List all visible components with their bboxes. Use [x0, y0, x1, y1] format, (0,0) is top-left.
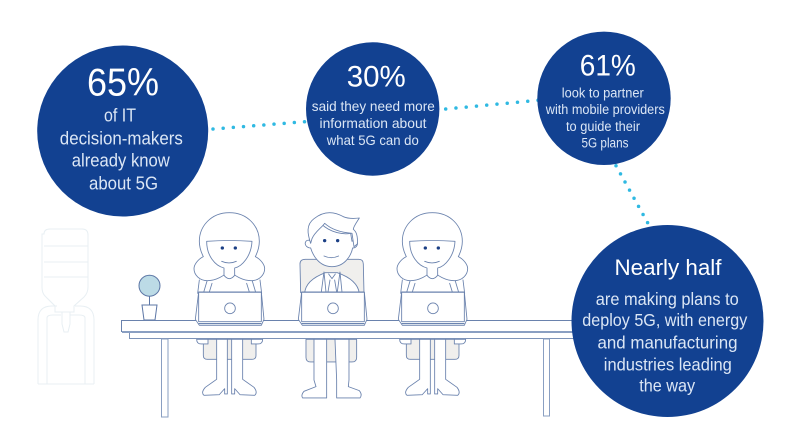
callout: nearly half: and manufacturing [598, 332, 738, 352]
callout: nearly half: Nearly half [614, 255, 722, 280]
laptop: right [398, 292, 467, 325]
dotted connector: 30% to 61% [446, 100, 538, 109]
callout: 65%: already know [72, 151, 171, 171]
callout: 61%: with mobile providers [545, 102, 665, 117]
callout: nearly half: the way [639, 376, 695, 396]
callout: 61% [537, 32, 671, 165]
dotted connector: 61% to nearly half [616, 166, 650, 227]
plant in pot [139, 275, 160, 320]
callout: 65% [37, 46, 208, 216]
laptop: center [298, 292, 367, 325]
callout: 65%: about 5G [89, 173, 158, 193]
laptop: left [195, 292, 264, 325]
callout: 61%: 5G plans [582, 135, 629, 150]
dotted connector: 65% to 30% [213, 122, 306, 129]
person: woman left [194, 213, 265, 395]
callout: nearly half: deploy 5G, with energy [582, 310, 748, 330]
person: man center [300, 213, 364, 398]
callout: 61%: 61% [580, 50, 636, 83]
callout: 65%: decision-makers [60, 128, 183, 148]
callout: 65%: 65% [87, 62, 159, 105]
callout: 30%: 30% [347, 61, 406, 94]
callout: nearly half: industries leading [604, 355, 732, 375]
person: woman right [397, 213, 468, 395]
callout: 30% [306, 42, 439, 176]
callout: 30%: information about [320, 115, 427, 131]
callout: 61%: look to partner [562, 86, 644, 101]
callout: 30%: what 5G can do [326, 132, 419, 148]
callout: 61%: to guide their [566, 119, 640, 134]
callout: nearly half: are making plans to [596, 289, 739, 309]
water cooler [38, 229, 94, 384]
callout: 30%: said they need more [312, 98, 435, 114]
desk [122, 320, 592, 417]
callout: nearly half [572, 225, 764, 417]
callout: 65%: of IT [104, 106, 136, 126]
